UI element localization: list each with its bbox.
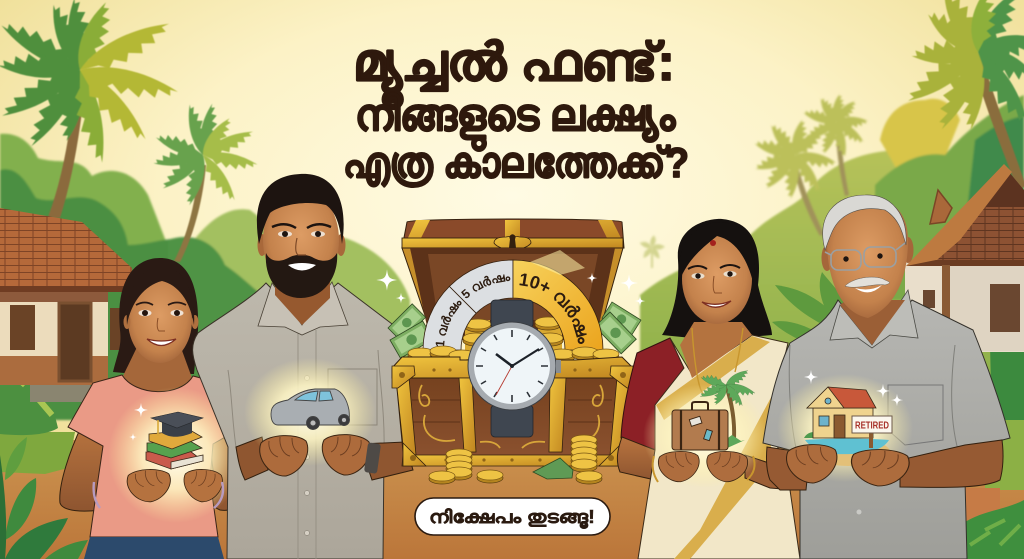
right yellow bush	[880, 99, 960, 175]
father buttons	[304, 376, 310, 536]
grandfather eyes	[843, 253, 883, 262]
mother arm left	[617, 437, 680, 480]
sand island	[806, 438, 890, 466]
girl arms	[60, 425, 140, 511]
palm: large right	[901, 0, 1024, 190]
watch ticks	[476, 330, 548, 402]
grandfather shirt	[763, 300, 1010, 559]
grandfather hair	[823, 195, 906, 250]
watch case	[468, 322, 556, 410]
dial label: 10+ years: 10+ വർഷം	[519, 274, 587, 344]
goal: education glow and icon	[108, 387, 244, 523]
palm: small left	[152, 102, 258, 262]
father smile	[288, 263, 316, 270]
girl eyes and smile	[136, 302, 186, 346]
palms: distant right	[753, 94, 869, 236]
father watch	[364, 442, 381, 474]
mother hair top	[678, 222, 755, 282]
grandfather moustache and smile	[845, 277, 890, 292]
mid green hill behind father	[190, 209, 410, 430]
girl skirt	[84, 537, 224, 559]
girl hair back	[113, 258, 198, 374]
coin stacks on ground	[429, 435, 602, 484]
mother hair back	[662, 219, 772, 340]
grandfather face	[827, 198, 908, 318]
time dial	[422, 250, 604, 350]
foliage bottom left	[0, 437, 88, 559]
mother chest skin	[680, 322, 752, 378]
father ears	[258, 234, 346, 256]
right green trees	[875, 95, 1024, 300]
banknotes on ground	[533, 458, 573, 479]
chest lid	[402, 219, 624, 248]
mother blouse	[621, 338, 690, 450]
palm tree	[698, 366, 756, 440]
left dark bush	[0, 169, 240, 420]
grandfather arms	[766, 447, 808, 490]
coins on chest rim	[408, 346, 619, 363]
ground	[0, 440, 1024, 559]
watch	[468, 300, 561, 437]
background hills and trees	[0, 95, 1024, 440]
father eyes	[272, 224, 331, 255]
dial segment: 10+ years	[513, 260, 603, 350]
grass and shrubs	[0, 345, 1024, 528]
grandfather collar	[830, 290, 918, 348]
grandfather sleeve folds	[789, 345, 958, 450]
girl hair top	[127, 266, 194, 325]
watch straps	[491, 300, 533, 328]
title	[343, 34, 689, 188]
father hair	[257, 174, 344, 244]
banknotes right	[595, 302, 641, 354]
chest body	[396, 378, 630, 462]
house: left	[0, 208, 132, 402]
watch face	[474, 328, 550, 404]
dial shine	[530, 250, 585, 275]
grandfather ears	[822, 237, 914, 271]
father beard	[266, 253, 337, 298]
dial label: 1 year: 1 വർഷം	[436, 300, 462, 346]
goal: car glow and icon	[244, 358, 376, 466]
goal: retirement glow and icon	[777, 370, 913, 482]
books stack	[146, 430, 203, 469]
mother hands	[658, 451, 748, 482]
sparkles around chest	[376, 269, 645, 306]
right pale hill	[640, 150, 1024, 440]
grandfather hands	[786, 445, 909, 486]
chest gold frame	[392, 366, 633, 466]
mother saree	[638, 335, 800, 559]
call to action button	[415, 498, 610, 535]
father hands	[260, 435, 370, 476]
girl bangles	[94, 482, 223, 508]
retirement house	[807, 387, 876, 438]
dial segment: 1 year	[423, 286, 476, 350]
father shirt	[193, 283, 412, 559]
mother necklace	[692, 328, 743, 395]
person: mother	[617, 219, 800, 559]
grandfather pocket	[888, 385, 943, 445]
chest rivets	[399, 368, 626, 462]
mother face	[682, 234, 752, 324]
girl face	[128, 277, 192, 363]
father placket	[298, 330, 316, 559]
dial label: 5 years: 5 വർഷം	[461, 274, 510, 298]
chest gold rim	[392, 357, 633, 378]
person: girl	[60, 258, 241, 559]
treasure chest	[388, 218, 642, 484]
mother eyes, bindi and smile	[688, 240, 740, 307]
graduation cap	[151, 412, 203, 437]
car	[271, 389, 350, 430]
father neck	[275, 270, 330, 325]
bushes	[804, 432, 825, 438]
title: നിങ്ങളുടെ ലക്ഷ്യം	[355, 91, 676, 151]
mid dark bush	[168, 237, 268, 410]
girl ears	[124, 315, 198, 329]
distant palm centre right	[639, 235, 666, 268]
girl neck	[122, 345, 192, 392]
mother arm right	[745, 455, 795, 490]
palm: large left	[0, 0, 180, 218]
person: grandfather	[763, 195, 1010, 559]
dial segment: 5 years	[449, 260, 513, 313]
watch hands	[496, 349, 539, 395]
mother bangles	[653, 456, 755, 482]
father face	[263, 188, 339, 292]
chest interior	[402, 248, 623, 330]
left light bush	[0, 134, 170, 330]
coins behind dial	[463, 317, 563, 358]
right middle hedge	[640, 360, 900, 440]
house: right	[905, 164, 1024, 352]
person: father	[193, 174, 413, 559]
chest scrolls	[419, 385, 603, 448]
father pocket	[328, 369, 377, 425]
grandfather glasses	[825, 243, 905, 270]
father sleeve folds	[228, 350, 384, 450]
foliage bottom right	[965, 500, 1024, 559]
father collar	[258, 282, 348, 335]
chest lock	[494, 236, 531, 252]
grandfather neck	[840, 300, 905, 345]
father arms	[236, 437, 268, 480]
girl hands	[127, 469, 222, 502]
girl t-shirt	[68, 375, 241, 537]
retired sign: RETIRED	[855, 420, 889, 432]
water	[805, 438, 889, 454]
tropical plant right	[772, 272, 848, 350]
call to action button: നിക്ഷേപം തുടങ്ങൂ!	[429, 507, 595, 529]
title: മ്യൂച്ചൽ ഫണ്ട്:	[353, 34, 675, 110]
chest plank lines	[412, 400, 612, 422]
suitcase	[672, 402, 728, 450]
mother saree gold border	[656, 336, 780, 559]
banknotes left	[388, 304, 433, 358]
goal: travel glow and icon	[643, 366, 767, 488]
grandfather button	[856, 510, 862, 514]
title: എത്ര കാലത്തേക്ക്?	[343, 139, 689, 188]
